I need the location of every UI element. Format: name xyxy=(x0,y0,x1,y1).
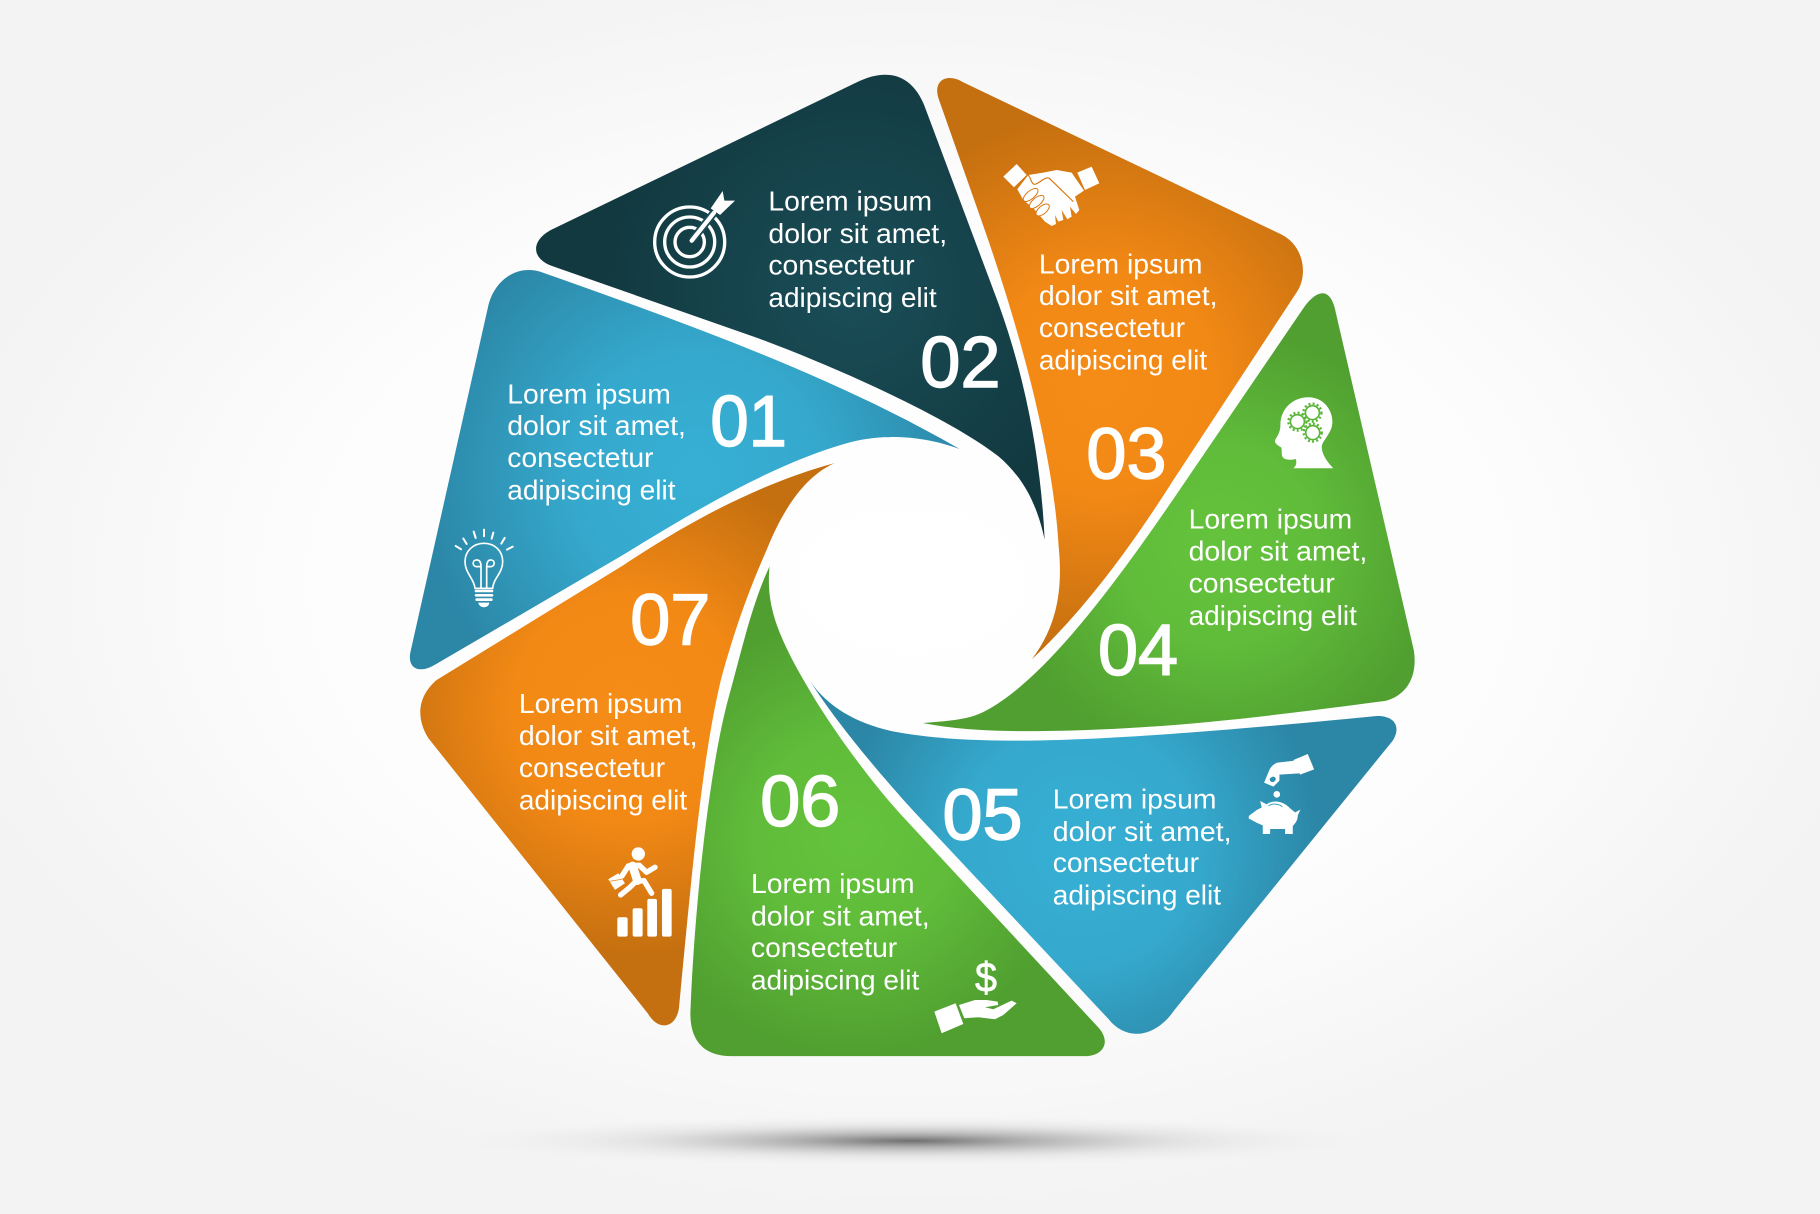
floor shadow xyxy=(453,1115,1370,1166)
icon: hand holding dollar xyxy=(934,953,1017,1033)
text 07 xyxy=(519,688,698,816)
text 06 xyxy=(751,868,930,995)
text 06: consectetur xyxy=(751,932,897,963)
icon: handshake xyxy=(1003,164,1099,226)
text 06: adipiscing elit xyxy=(751,964,920,995)
segment shape 03 xyxy=(937,78,1303,659)
text 01: Lorem ipsum xyxy=(507,378,671,409)
text 01: adipiscing elit xyxy=(507,475,676,506)
icon: runner climbing bar chart xyxy=(608,847,672,937)
text 06: Lorem ipsum xyxy=(751,868,915,899)
icon: hand dropping coin into piggy bank xyxy=(1249,754,1314,834)
text 01 xyxy=(507,378,686,506)
text 07: Lorem ipsum xyxy=(519,688,682,719)
text 02: consectetur xyxy=(768,249,915,280)
text 02: adipiscing elit xyxy=(768,282,937,313)
text 05 xyxy=(1053,783,1232,911)
text 03: consectetur xyxy=(1039,312,1185,343)
text 01: consectetur xyxy=(507,442,653,473)
segment shape 06 xyxy=(690,566,1105,1056)
text 07: adipiscing elit xyxy=(519,785,687,816)
text 03: adipiscing elit xyxy=(1039,345,1207,376)
panel: step 05 xyxy=(810,681,1397,1034)
number 01: 01 xyxy=(710,382,787,462)
panel: step 03 xyxy=(937,78,1303,659)
text 02: Lorem ipsum xyxy=(768,186,932,217)
text 02: dolor sit amet, xyxy=(768,218,947,249)
text 04 xyxy=(1189,504,1367,631)
panel: step 06 xyxy=(690,566,1105,1056)
text 07: consectetur xyxy=(519,752,665,783)
segment shape 02 xyxy=(536,75,1045,540)
text 05: consectetur xyxy=(1053,847,1199,878)
text 04: dolor sit amet, xyxy=(1189,536,1367,567)
segment shape 01 xyxy=(410,270,960,669)
text 04: Lorem ipsum xyxy=(1189,504,1352,535)
number 03: 03 xyxy=(1086,415,1166,495)
segment shape 05 xyxy=(810,681,1397,1034)
icon: light bulb xyxy=(456,530,513,607)
icon: head with gears xyxy=(1275,397,1333,468)
text 01: dolor sit amet, xyxy=(507,410,686,441)
text 03: dolor sit amet, xyxy=(1039,280,1218,311)
panel: step 07 xyxy=(420,463,835,1025)
text 05: adipiscing elit xyxy=(1053,880,1221,911)
text 03 xyxy=(1039,248,1218,376)
segment shape 07 xyxy=(420,463,835,1025)
panel: step 01 xyxy=(410,270,960,669)
icon: target with arrow xyxy=(655,191,735,277)
number 06: 06 xyxy=(760,762,840,842)
panel: step 04 xyxy=(923,293,1415,731)
text 05: Lorem ipsum xyxy=(1053,783,1216,814)
segment shape 04 xyxy=(923,293,1415,731)
number 05: 05 xyxy=(943,776,1023,856)
text 05: dolor sit amet, xyxy=(1053,816,1232,847)
number 07: 07 xyxy=(630,581,710,661)
text 04: consectetur xyxy=(1189,567,1335,598)
text 02 xyxy=(768,186,947,313)
text 03: Lorem ipsum xyxy=(1039,248,1202,279)
text 07: dolor sit amet, xyxy=(519,720,698,751)
icon: hand holding dollar: $ xyxy=(975,953,997,1000)
number 04: 04 xyxy=(1098,611,1178,691)
panel: step 02 xyxy=(536,75,1045,540)
text 06: dolor sit amet, xyxy=(751,901,930,932)
number 02: 02 xyxy=(920,323,1000,403)
text 04: adipiscing elit xyxy=(1189,600,1357,631)
